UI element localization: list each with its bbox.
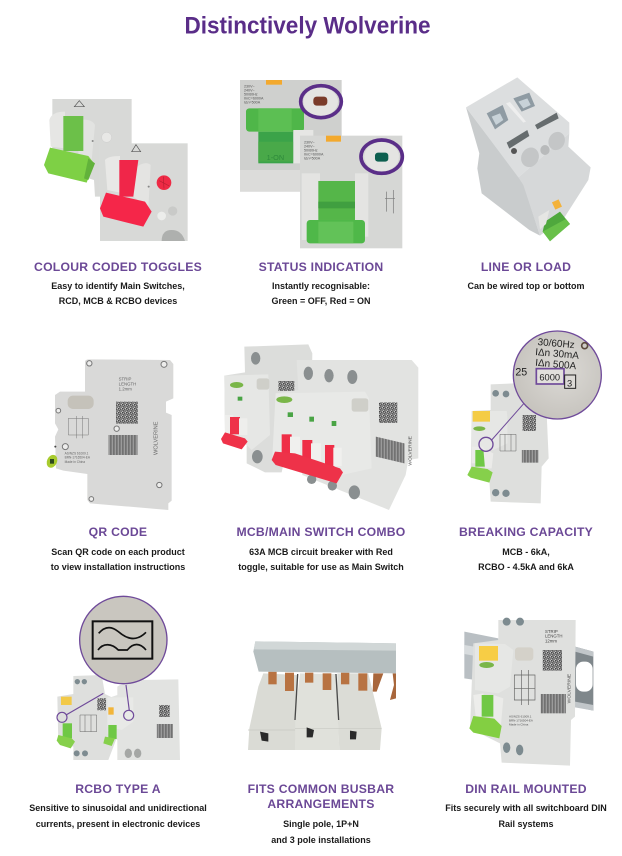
magnifier circle: IΔn 500A <box>535 358 577 372</box>
description: Green = OFF, Red = ON <box>271 296 371 306</box>
magnifier circle: 6000 <box>539 372 560 382</box>
icon: breaker side view with QR code: 1.2mm <box>119 386 132 391</box>
icon: breaker with green indicator: 240V~ <box>304 144 315 148</box>
description: Easy to identify Main Switches, <box>51 281 185 291</box>
icon: breaker side view with QR code: Made in China <box>65 460 85 464</box>
heading: DIN RAIL MOUNTED <box>465 782 587 796</box>
panel: status indication <box>240 80 402 306</box>
icon: RCD isometric device <box>466 77 591 241</box>
heading: LINE OR LOAD <box>481 260 571 274</box>
icon: breaker with green indicator <box>300 136 402 248</box>
icon: breaker side view with QR code: WOLVERINE <box>153 421 159 455</box>
heading: COLOUR CODED TOGGLES <box>34 260 202 274</box>
description: Single pole, 1P+N <box>283 819 359 829</box>
heading: QR CODE <box>89 525 147 539</box>
icon: RCBO with magnifier <box>467 331 601 503</box>
icon: RCBO on DIN rail: AS/NZS 61009.1 <box>509 715 532 719</box>
icon: RCBO on DIN rail <box>464 618 593 766</box>
icon: breaker with red indicator: 50/60Hz <box>244 92 258 96</box>
callout line <box>492 403 524 440</box>
icon: breaker with red indicator <box>240 80 342 192</box>
panel: QR code <box>45 359 185 572</box>
icon: RCBO on DIN rail: LENGTH <box>545 633 563 638</box>
description: toggle, suitable for use as Main Switch <box>238 562 404 572</box>
icon: breaker with red indicator: 1-ON <box>267 153 284 162</box>
magnifier circle: IΔn 30mA <box>535 347 580 362</box>
panel: fits common busbar <box>248 641 396 845</box>
icon: breaker with green indicator: 230V~ <box>304 140 315 144</box>
magnifier circle: 25 <box>515 367 527 379</box>
icon: three pole MCB: WOLVERINE <box>408 435 414 466</box>
icon: RCBO on DIN rail: WOLVERINE <box>567 673 573 703</box>
description: to view installation instructions <box>51 562 185 572</box>
panel: colour coded toggles <box>34 99 202 306</box>
description: Instantly recognisable: <box>272 281 370 291</box>
icon: breaker side view with QR code: STRIP <box>119 376 132 381</box>
description: Can be wired top or bottom <box>468 281 584 291</box>
icon: breaker side view with QR code: AS/NZS 61009.1 <box>65 452 89 456</box>
description: Rail systems <box>498 819 554 829</box>
icon: RCBO on DIN rail: Made in China <box>509 722 529 726</box>
icon: breaker with green indicator: 50/60Hz <box>304 148 318 152</box>
callout lines <box>66 685 129 715</box>
icon: breaker with green indicator: IInC=6000A <box>304 152 324 156</box>
icon: three pole MCB <box>272 360 418 510</box>
icon: busbar on three breakers <box>248 641 396 750</box>
heading: FITS COMMON BUSBAR <box>248 782 394 796</box>
icon: breaker side view with QR code <box>45 359 173 510</box>
icon: breaker with red indicator: 230V~ <box>244 84 255 88</box>
icon: breaker with red indicator: IInC=6000A <box>244 96 264 100</box>
panel: MCB main switch combo <box>221 344 418 572</box>
panel: line or load <box>466 77 591 291</box>
description: Scan QR code on each product <box>51 547 185 557</box>
icon: breaker side view with QR code: LENGTH <box>119 381 136 386</box>
description: and 3 pole installations <box>271 835 371 845</box>
icon: breaker side view with QR code: BRN-1716504-EA <box>65 456 91 460</box>
description: Sensitive to sinusoidal and unidirectional <box>29 803 207 813</box>
heading: ARRANGEMENTS <box>267 797 375 811</box>
magnifier circle: 3 <box>567 378 572 388</box>
description: RCD, MCB & RCBO devices <box>59 296 177 306</box>
icon: two RCBOs with magnifier <box>57 596 180 760</box>
panel: DIN rail mounted <box>445 618 607 829</box>
magnifier circle with wave symbol <box>80 596 167 684</box>
icon: breaker with red indicator: 240V~ <box>244 88 255 92</box>
icon: RCBO on DIN rail: STRIP <box>545 629 558 634</box>
description: currents, present in electronic devices <box>36 819 200 829</box>
icon: two pole MCB <box>221 344 312 472</box>
heading: MCB/MAIN SWITCH COMBO <box>236 525 406 539</box>
description: RCBO - 4.5kA and 6kA <box>478 562 574 572</box>
heading: STATUS INDICATION <box>259 260 383 274</box>
icon: breaker with green indicator: IΔn=500A <box>304 156 321 160</box>
description: 63A MCB circuit breaker with Red <box>249 547 393 557</box>
title: Distinctively Wolverine <box>184 12 430 40</box>
icon: breaker with red indicator: IΔn=500A <box>244 100 261 104</box>
icon: RCBO on DIN rail: 12mm <box>545 638 557 643</box>
panel: RCBO type A <box>29 596 207 829</box>
heading: BREAKING CAPACITY <box>459 525 593 539</box>
description: Fits securely with all switchboard DIN <box>445 803 607 813</box>
magnifier circle: 30/60Hz <box>537 337 575 351</box>
icon: RCBO on DIN rail: BRN-1716504-EA <box>509 718 533 722</box>
icon: red toggle breaker <box>100 143 188 241</box>
heading: RCBO TYPE A <box>75 782 161 796</box>
panel: breaking capacity <box>459 331 601 572</box>
icon: green toggle breaker <box>44 99 132 197</box>
description: MCB - 6kA, <box>502 547 550 557</box>
magnifier circle <box>513 331 601 419</box>
